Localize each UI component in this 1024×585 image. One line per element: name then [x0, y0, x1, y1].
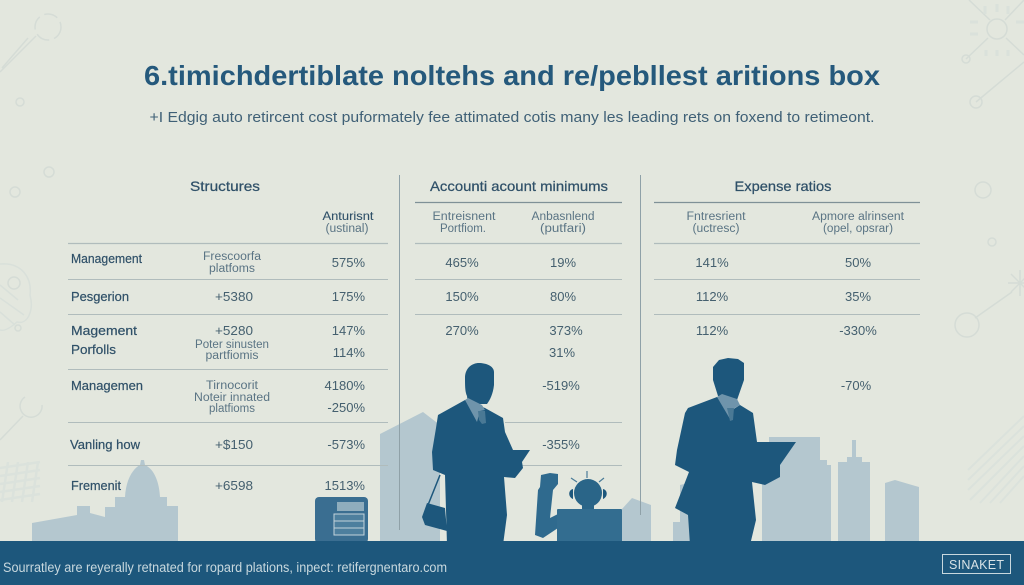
- percentage column: 175%: [332, 289, 365, 304]
- values: 141%: [695, 255, 729, 270]
- values: -70%: [841, 378, 872, 393]
- percentage column: 1513%: [325, 478, 365, 493]
- column headers: (uctresc): [692, 223, 740, 235]
- row labels: Pesgerion: [71, 290, 129, 304]
- values: 35%: [845, 289, 871, 304]
- row labels: Magement: [71, 324, 138, 338]
- column header: [322, 209, 374, 235]
- figure: child with raised fist at laptop: [535, 471, 622, 543]
- row labels: Managemen: [71, 379, 143, 393]
- footer note: Sourratley are reyerally retnated for ropard plations, inpect: retifergnentaro.com: [3, 560, 447, 575]
- row labels: Management: [71, 252, 143, 266]
- platform column: +5280: [215, 323, 253, 338]
- platform column: Frescoorfa: [203, 251, 262, 263]
- platform column: Noteir innated: [194, 392, 270, 404]
- panel: structures table: [68, 178, 388, 493]
- platform column: [194, 251, 270, 493]
- platform column: Poter sinusten: [195, 339, 269, 351]
- column headers: (putfari): [540, 223, 586, 235]
- percentage column: -250%: [327, 400, 365, 415]
- percentage column: 575%: [332, 255, 365, 270]
- platform column: +5380: [215, 289, 253, 304]
- values: 112%: [696, 289, 729, 304]
- decorative icons: left side: [0, 14, 61, 502]
- heading: expense ratios: Expense ratios: [734, 178, 832, 194]
- row labels: [70, 252, 143, 493]
- column headers: [686, 211, 905, 235]
- column headers: (opel, opsrar): [823, 223, 893, 235]
- percentage column: -573%: [327, 437, 365, 452]
- logo box: [942, 554, 1010, 574]
- column headers: Portfiom.: [440, 223, 486, 235]
- column header: Anturisnt: [322, 209, 374, 223]
- row labels: Fremenit: [71, 479, 122, 493]
- values: 19%: [550, 255, 576, 270]
- platform column: Tirnocorit: [206, 380, 259, 392]
- heading: account minimums: Accounti acount minimums: [430, 178, 608, 194]
- column headers: Entreisnent: [432, 211, 496, 223]
- skyline: left dome: [32, 460, 178, 541]
- percentage column: 4180%: [325, 378, 365, 393]
- row dividers: [654, 202, 920, 314]
- footer bar: [0, 541, 1024, 585]
- values: 270%: [445, 323, 479, 338]
- percentage column: 147%: [332, 323, 365, 338]
- divider: left: [398, 175, 400, 530]
- divider: right: [640, 175, 642, 515]
- percentage column: [325, 255, 365, 493]
- decorative icons: right side: [955, 0, 1024, 503]
- platform column: partfiomis: [206, 350, 259, 362]
- row dividers: [415, 202, 622, 466]
- platform column: platfioms: [209, 403, 255, 415]
- values: -519%: [542, 378, 580, 393]
- icon: device box: [315, 497, 368, 543]
- values: [695, 255, 877, 393]
- subtitle: +I Edgig auto retircent cost puformately fee attimated cotis many les leading rets on foxend to retimeont.: [150, 109, 874, 126]
- percentage column: 114%: [333, 345, 365, 360]
- heading: structures: Structures: [190, 178, 260, 194]
- values: 31%: [549, 345, 575, 360]
- platform column: platfoms: [209, 263, 255, 275]
- figure: left person with tablet and handbag: [422, 363, 530, 545]
- column headers: Fntresrient: [686, 211, 746, 223]
- values: -330%: [839, 323, 877, 338]
- column header: (ustinal): [326, 223, 369, 235]
- platform column: +6598: [215, 478, 253, 493]
- panel: expense ratios table: [654, 178, 920, 393]
- row labels: Porfolls: [71, 343, 116, 357]
- row labels: Vanling how: [70, 438, 141, 452]
- values: 112%: [696, 323, 729, 338]
- values: [445, 255, 583, 452]
- column headers: [432, 211, 594, 235]
- values: 465%: [445, 255, 479, 270]
- figure: right person with tablet: [675, 358, 796, 545]
- column headers: Apmore alrinsent: [812, 211, 905, 223]
- skyline: centre and right buildings: [380, 412, 919, 541]
- values: 80%: [550, 289, 576, 304]
- platform column: +$150: [215, 437, 253, 452]
- column headers: Anbasnlend: [532, 211, 594, 223]
- values: -355%: [542, 437, 580, 452]
- title: 6.timichdertiblate noltehs and re/pebllest aritions box: [144, 60, 880, 91]
- logo box: SINAKET: [949, 558, 1004, 572]
- row dividers: [68, 244, 388, 466]
- values: 373%: [549, 323, 583, 338]
- values: 150%: [445, 289, 479, 304]
- panel: account minimums table: [415, 178, 622, 466]
- values: 50%: [845, 255, 871, 270]
